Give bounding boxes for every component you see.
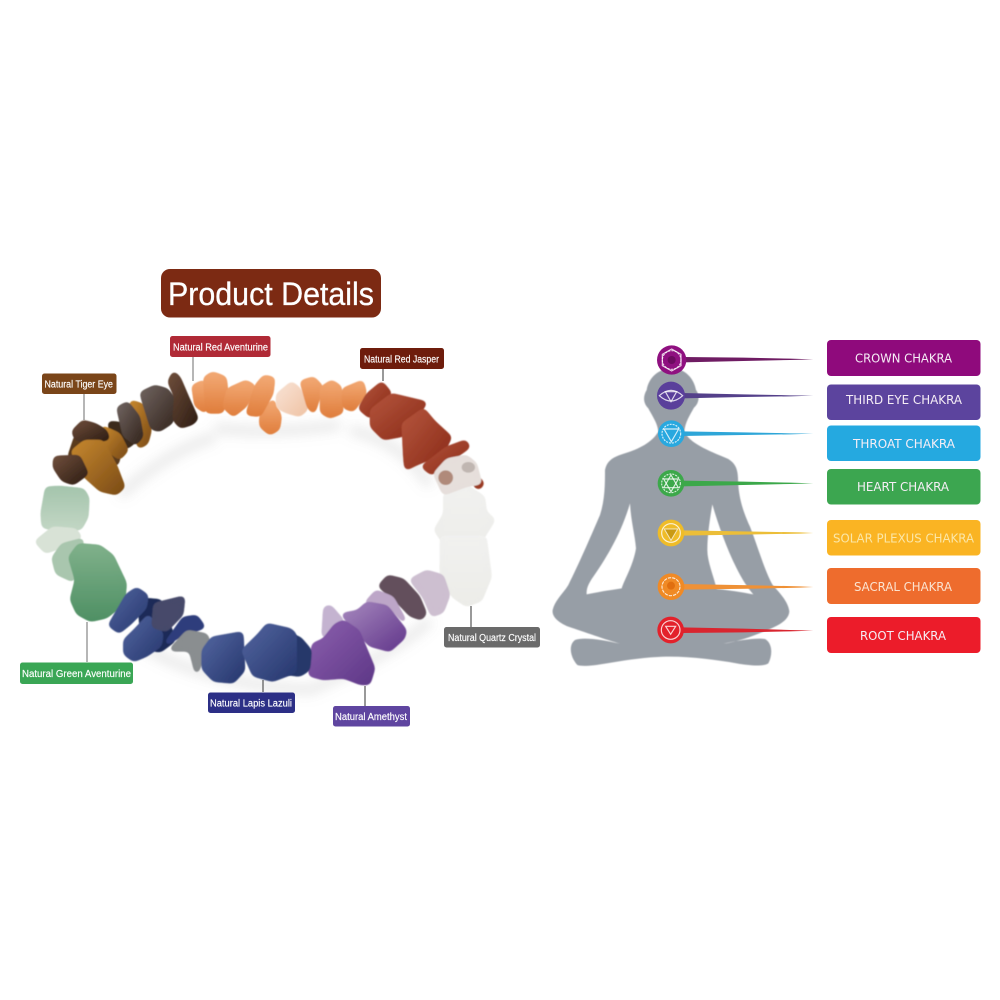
stones: red aventurine bbox=[194, 374, 279, 433]
label: Natural Red Jasper bbox=[360, 348, 444, 381]
label: Natural Red Jasper: Natural Red Jasper bbox=[364, 354, 440, 366]
stone: lapis edge bbox=[267, 627, 309, 674]
button: root chakra bbox=[827, 617, 980, 653]
bracelet photo bbox=[37, 374, 493, 690]
button: solar plexus chakra: SOLAR PLEXUS CHAKRA bbox=[833, 532, 975, 546]
button: third eye chakra bbox=[827, 384, 980, 420]
button: third eye chakra: THIRD EYE CHAKRA bbox=[845, 393, 963, 407]
stones: tiger eye bbox=[55, 374, 196, 493]
chakra: crown bbox=[657, 345, 813, 375]
label: Natural Quartz Crystal: Natural Quartz Crystal bbox=[448, 633, 536, 644]
label: Natural Lapis Lazuli bbox=[208, 680, 295, 713]
stones: green aventurine bbox=[37, 488, 294, 681]
stones: amethyst bbox=[311, 572, 448, 683]
label: Natural Amethyst bbox=[333, 686, 410, 726]
button: heart chakra: HEART CHAKRA bbox=[857, 480, 950, 494]
button: sacral chakra bbox=[827, 568, 980, 604]
chakra: third eye bbox=[657, 382, 813, 410]
button: sacral chakra: SACRAL CHAKRA bbox=[854, 580, 953, 594]
button: throat chakra: THROAT CHAKRA bbox=[852, 437, 956, 451]
chakra: sacral bbox=[658, 573, 813, 600]
label: Natural Tiger Eye: Natural Tiger Eye bbox=[44, 380, 113, 390]
chakra: throat bbox=[658, 420, 813, 447]
stones: lapis lazuli bbox=[111, 590, 294, 681]
label: Natural Green Aventurine bbox=[20, 622, 133, 684]
button: crown chakra bbox=[827, 340, 980, 376]
label: Natural Amethyst: Natural Amethyst bbox=[335, 712, 407, 723]
label: Natural Green Aventurine: Natural Green Aventurine bbox=[22, 669, 131, 680]
label: Natural Quartz Crystal bbox=[444, 606, 540, 648]
chakra: root bbox=[657, 617, 813, 643]
label: Natural Red Aventurine: Natural Red Aventurine bbox=[173, 342, 268, 354]
label: Natural Tiger Eye bbox=[42, 374, 116, 420]
stones: quartz crystal bbox=[436, 457, 493, 570]
meditating figure silhouette bbox=[553, 368, 789, 666]
chakra: heart bbox=[658, 470, 813, 497]
button: throat chakra bbox=[827, 426, 980, 461]
button: root chakra: ROOT CHAKRA bbox=[860, 629, 947, 643]
button: solar plexus chakra bbox=[827, 520, 980, 556]
label: Natural Red Aventurine bbox=[170, 336, 270, 381]
button: crown chakra: CROWN CHAKRA bbox=[855, 352, 953, 366]
chakra: solar plexus bbox=[658, 520, 813, 546]
label: Natural Lapis Lazuli: Natural Lapis Lazuli bbox=[210, 698, 292, 710]
stones: red jasper bbox=[361, 384, 482, 487]
heading: Product Details: Product Details bbox=[168, 276, 374, 312]
button: heart chakra bbox=[827, 469, 980, 504]
